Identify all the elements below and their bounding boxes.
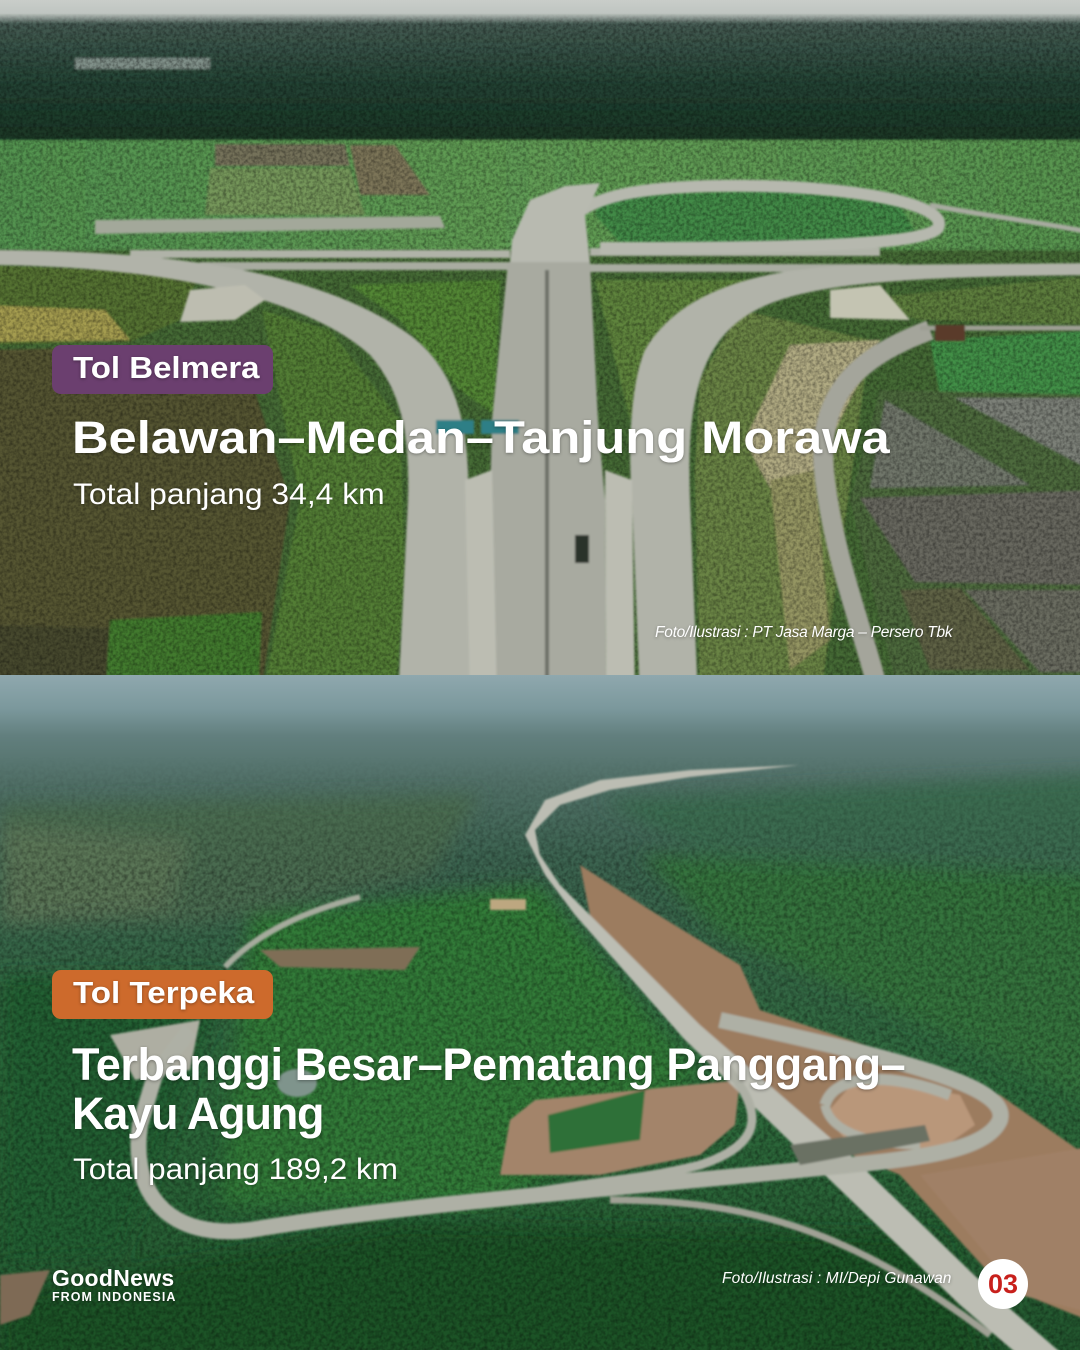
sky strip: [0, 0, 1080, 24]
tag: Tol Belmera: [52, 345, 273, 394]
horizontal roads: [130, 252, 880, 254]
caption: Terpeka photo credit: Foto/Ilustrasi : MI/Depi Gunawan: [722, 1270, 952, 1287]
heading: Terbanggi Besar-Pematang Panggang-Kayu Agung: [72, 1039, 906, 1141]
photo: Terpeka toll road aerial view: [0, 675, 1080, 1350]
main road neck: [510, 183, 600, 262]
page number badge: [978, 1259, 1028, 1309]
upper loop: [560, 186, 939, 248]
tag: Tol Belmera: Tol Belmera: [73, 350, 260, 385]
photo: Belmera interchange aerial view: [0, 0, 1080, 675]
heading: Terbanggi Besar-Pematang Panggang-Kayu Agung: Kayu Agung: [72, 1088, 323, 1139]
interchange: [138, 1020, 1001, 1231]
logo: GoodNews from Indonesia: [52, 1265, 176, 1304]
heading: Terbanggi Besar-Pematang Panggang-Kayu Agung: Terbanggi Besar–Pematang Panggang–: [72, 1039, 905, 1090]
left ramp: [0, 250, 470, 700]
text: total length Terpeka: Total panjang 189,2 km: [73, 1153, 398, 1186]
main road: [490, 262, 606, 700]
tag: Tol Terpeka: Tol Terpeka: [73, 975, 254, 1010]
right ramp: [630, 263, 1080, 700]
caption: Belmera photo credit: Foto/Ilustrasi : PT Jasa Marga – Persero Tbk: [655, 624, 952, 641]
logo: GoodNews from Indonesia: FROM INDONESIA: [52, 1290, 176, 1304]
bare earth: [580, 865, 1080, 1325]
service road: [823, 330, 930, 690]
logo: GoodNews from Indonesia: GoodNews: [52, 1265, 175, 1291]
highway: [525, 765, 1075, 1350]
page number badge: 03: [988, 1269, 1018, 1299]
tag: Tol Terpeka: [52, 970, 273, 1019]
heading: Belawan-Medan-Tanjung Morawa: Belawan–Medan–Tanjung Morawa: [72, 412, 890, 463]
text: total length Belmera: Total panjang 34,4 km: [73, 478, 385, 511]
